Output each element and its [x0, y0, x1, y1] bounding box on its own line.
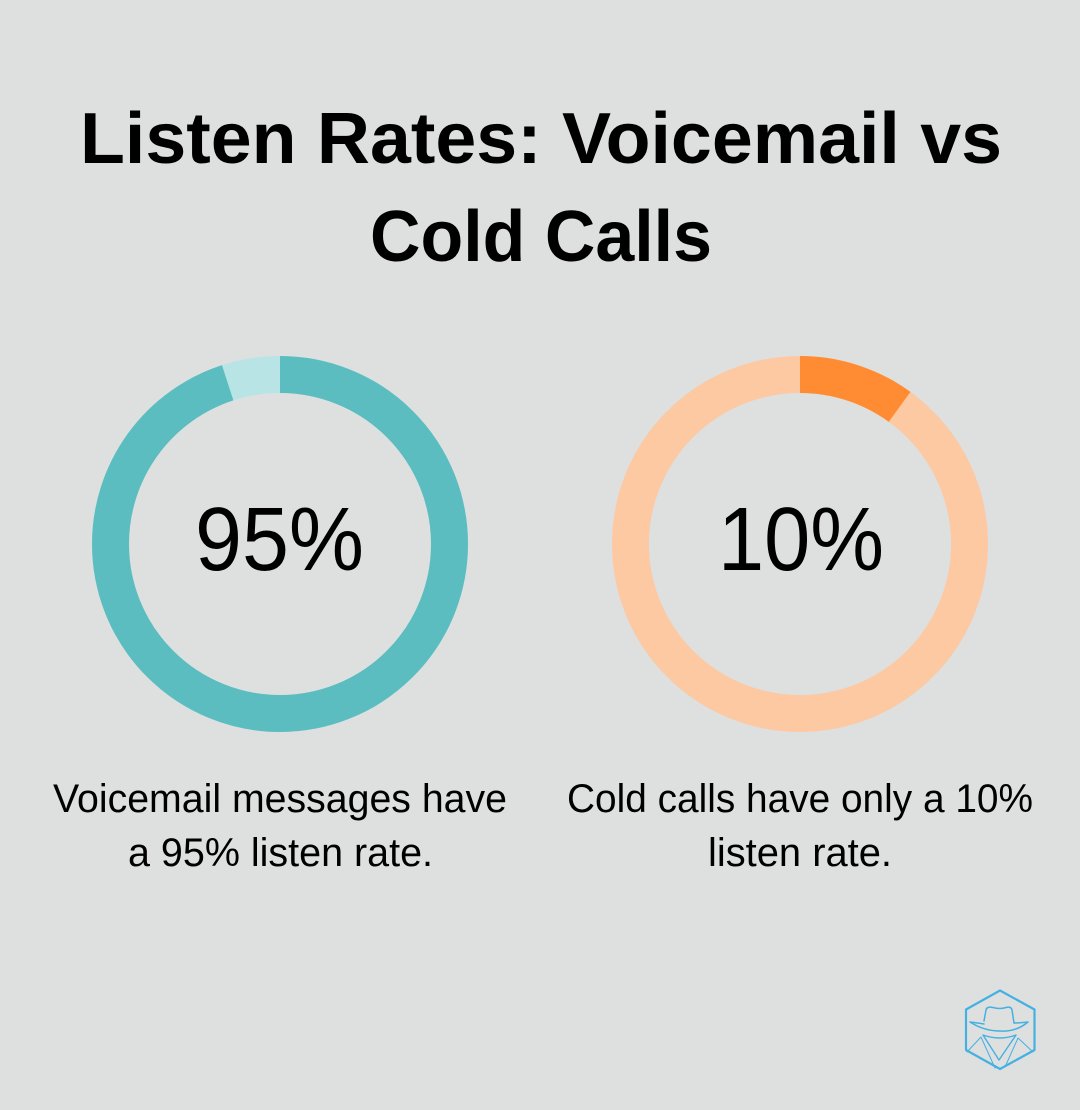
donut chart: cold calls 10% [630, 374, 970, 714]
description: cold calls [567, 777, 1033, 875]
value: 95%: 95% [195, 490, 364, 590]
description: voicemail [53, 777, 507, 875]
description: cold calls: listen rate. [708, 831, 892, 875]
donut chart: voicemail 95% [110, 374, 450, 714]
title: Listen Rates: Voicemail vs [80, 99, 1002, 179]
description: voicemail: Voicemail messages have [53, 777, 507, 821]
value: 10%: 10% [718, 490, 884, 590]
panel: voicemail [53, 374, 507, 875]
title: Cold Calls [370, 197, 712, 277]
panel: cold calls [567, 374, 1033, 875]
title [80, 99, 1002, 277]
icon: hat logo [966, 990, 1034, 1069]
description: voicemail: a 95% listen rate. [128, 831, 433, 875]
description: cold calls: Cold calls have only a 10% [567, 777, 1033, 821]
